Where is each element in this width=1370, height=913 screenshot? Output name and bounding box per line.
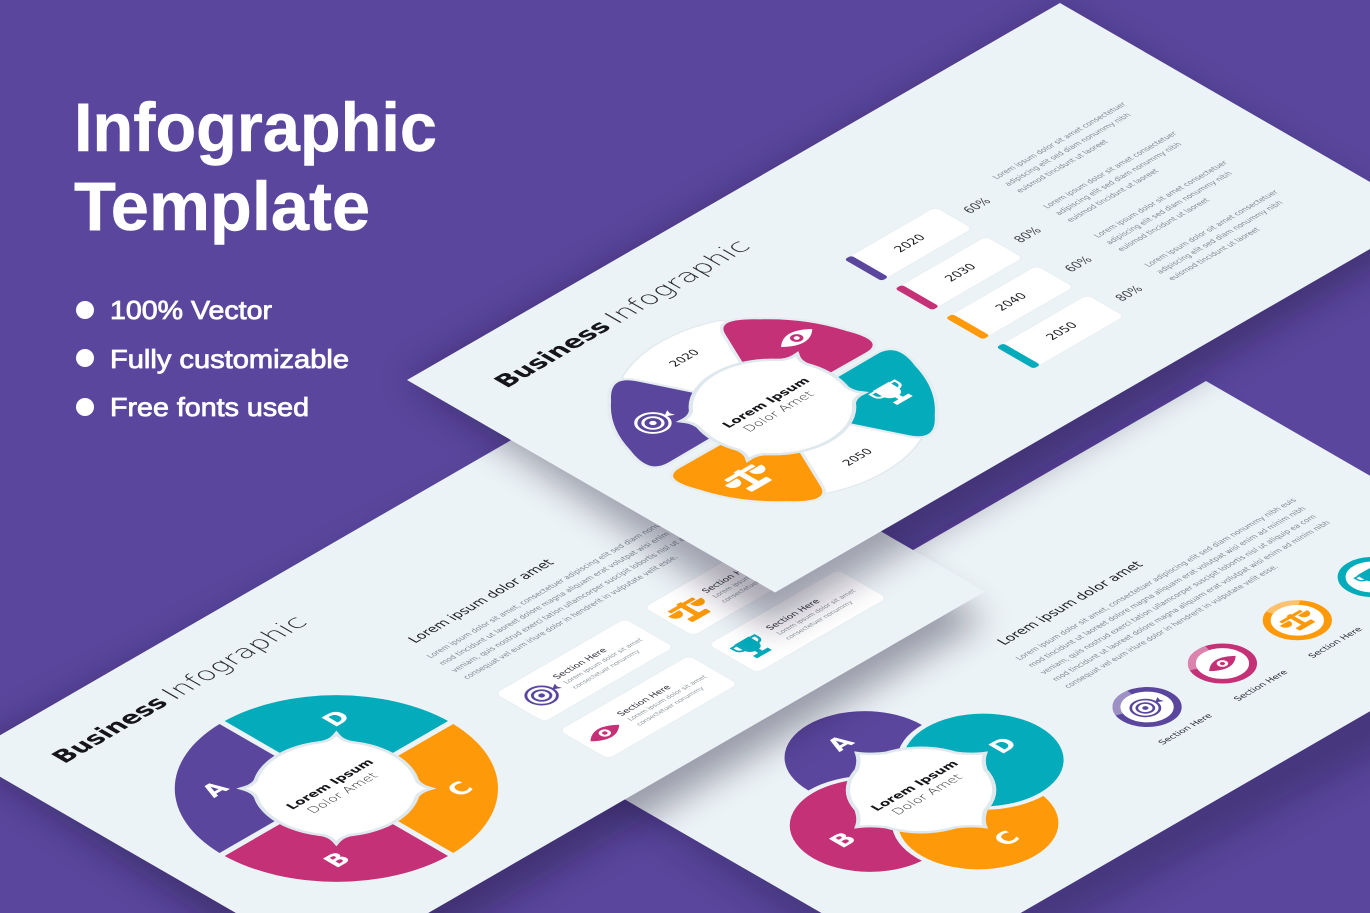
row: 2020: euismod tincidunt ut laoreet	[1014, 138, 1110, 194]
row: 2050: 80%	[1112, 284, 1147, 304]
feature list	[76, 295, 349, 422]
row: 2040: euismod tincidunt ut laoreet	[1115, 197, 1212, 253]
center badge: Dolor Amet	[888, 772, 966, 817]
card: trophy: Section Here	[764, 598, 823, 632]
panel: lower left slide	[0, 379, 985, 913]
petal A: A	[820, 732, 861, 755]
body text: mod tincidunt ut laoreet dolore magna aliquam erat volutpat wisi enim ad minim nibh	[437, 503, 720, 667]
card: target	[495, 618, 674, 722]
heading: Lorem ipsum dolor amet	[994, 559, 1147, 648]
row: 2050	[996, 188, 1309, 369]
row: 2040	[946, 159, 1259, 340]
card: scale: Section Here	[700, 561, 759, 595]
shadow: lower right slide	[553, 400, 1370, 913]
center badge: Lorem Ipsum	[283, 757, 377, 812]
segment A: A	[195, 778, 236, 801]
body text: Lorem ipsum dolor sit amet, consectetuer adipiscing elit sed diam nonummy nibh euis	[425, 494, 710, 660]
panel: top slide	[407, 3, 1370, 592]
card: target: Lorem ipsum dolor sit amet	[562, 637, 645, 685]
card: eye: Section Here	[615, 684, 674, 718]
title: Infographic	[598, 235, 757, 328]
segment C: C	[440, 778, 480, 800]
title	[45, 611, 314, 767]
row: 2020: 60%	[960, 196, 995, 216]
body text: veniam, quis nostrud exerci tation ullamcorper suscipit lobortis nisl ut aliquip ea com	[1038, 513, 1319, 676]
body text: consequat vel eum iriure dolor in hendrerit in vulputate velit esse.	[461, 554, 680, 681]
segment C	[230, 679, 610, 898]
row: 2020: Lorem ipsum dolor sit amet consectetuer	[991, 101, 1129, 181]
segment: 2020: 2020	[666, 347, 703, 369]
card: target: consectetuer nonummy	[570, 648, 642, 690]
segment: 2050	[728, 382, 936, 501]
center badge	[798, 719, 1044, 861]
section: eye ring	[1165, 630, 1294, 705]
segment: 2050: 2050	[839, 446, 876, 468]
petal A	[747, 690, 983, 826]
section: target ring: Section Here	[1157, 712, 1215, 747]
center badge	[655, 339, 890, 475]
row: 2050: euismod tincidunt ut laoreet	[1166, 226, 1262, 282]
title	[487, 235, 757, 392]
petal diagram	[691, 656, 1153, 913]
card: eye	[559, 656, 738, 759]
title: Business	[45, 692, 174, 767]
body text: Lorem ipsum dolor sit amet, consectetuer adipiscing elit sed diam nonummy nibh euis	[1014, 497, 1299, 662]
center badge	[224, 724, 449, 854]
card: eye: consectetuer nonummy	[634, 685, 706, 727]
row: 2020	[844, 100, 1158, 281]
card: scale: Lorem ipsum dolor sit amet	[710, 551, 794, 599]
body text: veniam, quis nostrud exerci tation ullamcorper suscipit lobortis nisl ut aliquip ea com	[449, 511, 731, 674]
row: 2030	[895, 129, 1208, 310]
card: trophy	[708, 570, 887, 673]
segment D: D	[316, 707, 357, 730]
body text: mod tincidunt ut laoreet dolore magna aliquam erat volutpat wisi enim ad minim nibh	[1026, 505, 1308, 669]
segment: eye	[634, 277, 939, 453]
row: 2040: adipiscing elit sed diam nonummy nibh	[1104, 170, 1234, 246]
section: trophy ring	[1325, 550, 1370, 616]
section: scale ring	[1242, 588, 1368, 661]
row: 2020: adipiscing elit sed diam nonummy nibh	[1002, 112, 1133, 187]
row: 2030: Lorem ipsum dolor sit amet consectetuer	[1041, 130, 1180, 210]
shadow: lower left slide	[0, 400, 985, 913]
petal B: B	[823, 828, 863, 852]
segment A	[63, 679, 443, 898]
row: 2040: 60%	[1062, 254, 1096, 275]
petal C: C	[987, 827, 1027, 850]
feature list: 100% Vector	[110, 295, 272, 325]
card: target: Section Here	[551, 647, 610, 681]
row: 2040: Lorem ipsum dolor sit amet consectetuer	[1092, 159, 1230, 239]
segment: scale	[606, 368, 911, 544]
petal B	[752, 758, 988, 894]
segment D	[146, 631, 526, 850]
section: scale ring: Section Here	[1306, 626, 1365, 660]
row: 2030: adipiscing elit sed diam nonummy nibh	[1053, 141, 1184, 217]
segment: target	[537, 329, 842, 505]
card: eye: Lorem ipsum dolor sit amet	[626, 674, 709, 722]
flower chart	[534, 270, 1009, 545]
center badge: Lorem Ipsum	[867, 758, 962, 813]
row: 2030: 80%	[1011, 225, 1046, 245]
petal D: D	[983, 734, 1024, 757]
feature list: Fully customizable	[110, 344, 349, 374]
main title	[74, 89, 437, 245]
heading: Lorem ipsum dolor amet	[405, 557, 558, 646]
section: target ring	[1092, 675, 1218, 748]
title: Business	[488, 316, 617, 392]
center badge: Dolor Amet	[303, 770, 382, 816]
body text: consequat vel eum iriure dolor in hendrerit in vulputate velit esse.	[1062, 563, 1280, 690]
main title: Infographic	[74, 89, 437, 166]
petal C	[860, 755, 1096, 891]
panel: lower right slide	[553, 381, 1370, 913]
row: 2040: 2040	[992, 291, 1030, 313]
segment B: B	[317, 848, 357, 872]
segment B	[146, 727, 526, 913]
title: Infographic	[155, 611, 314, 704]
center badge: Lorem Ipsum	[719, 375, 813, 430]
donut chart	[63, 631, 610, 913]
row: 2050: 2050	[1043, 320, 1081, 342]
petal D	[866, 692, 1101, 828]
segment: trophy	[704, 312, 1009, 488]
card: scale: consectetuer nonummy	[719, 562, 791, 604]
feature list: Free fonts used	[110, 392, 309, 422]
row: 2050: adipiscing elit sed diam nonummy nibh	[1154, 199, 1285, 275]
shadow: top slide	[407, 10, 1370, 628]
main title: Template	[74, 168, 370, 245]
card: trophy: consectetuer nonummy	[783, 599, 855, 641]
row: 2030: euismod tincidunt ut laoreet	[1065, 168, 1161, 223]
card: trophy: Lorem ipsum dolor sit amet	[775, 588, 858, 636]
row: 2020: 2020	[891, 232, 929, 254]
center badge: Dolor Amet	[740, 389, 818, 434]
row: 2030: 2030	[941, 261, 979, 284]
body text: mod tincidunt ut laoreet dolore magna aliquam erat volutpat wisi enim ad minim nibh	[1050, 519, 1332, 683]
row: 2050: Lorem ipsum dolor sit amet consectetuer	[1143, 188, 1281, 268]
segment: 2020	[609, 313, 816, 432]
card: scale	[644, 532, 823, 636]
section: eye ring: Section Here	[1232, 669, 1291, 703]
